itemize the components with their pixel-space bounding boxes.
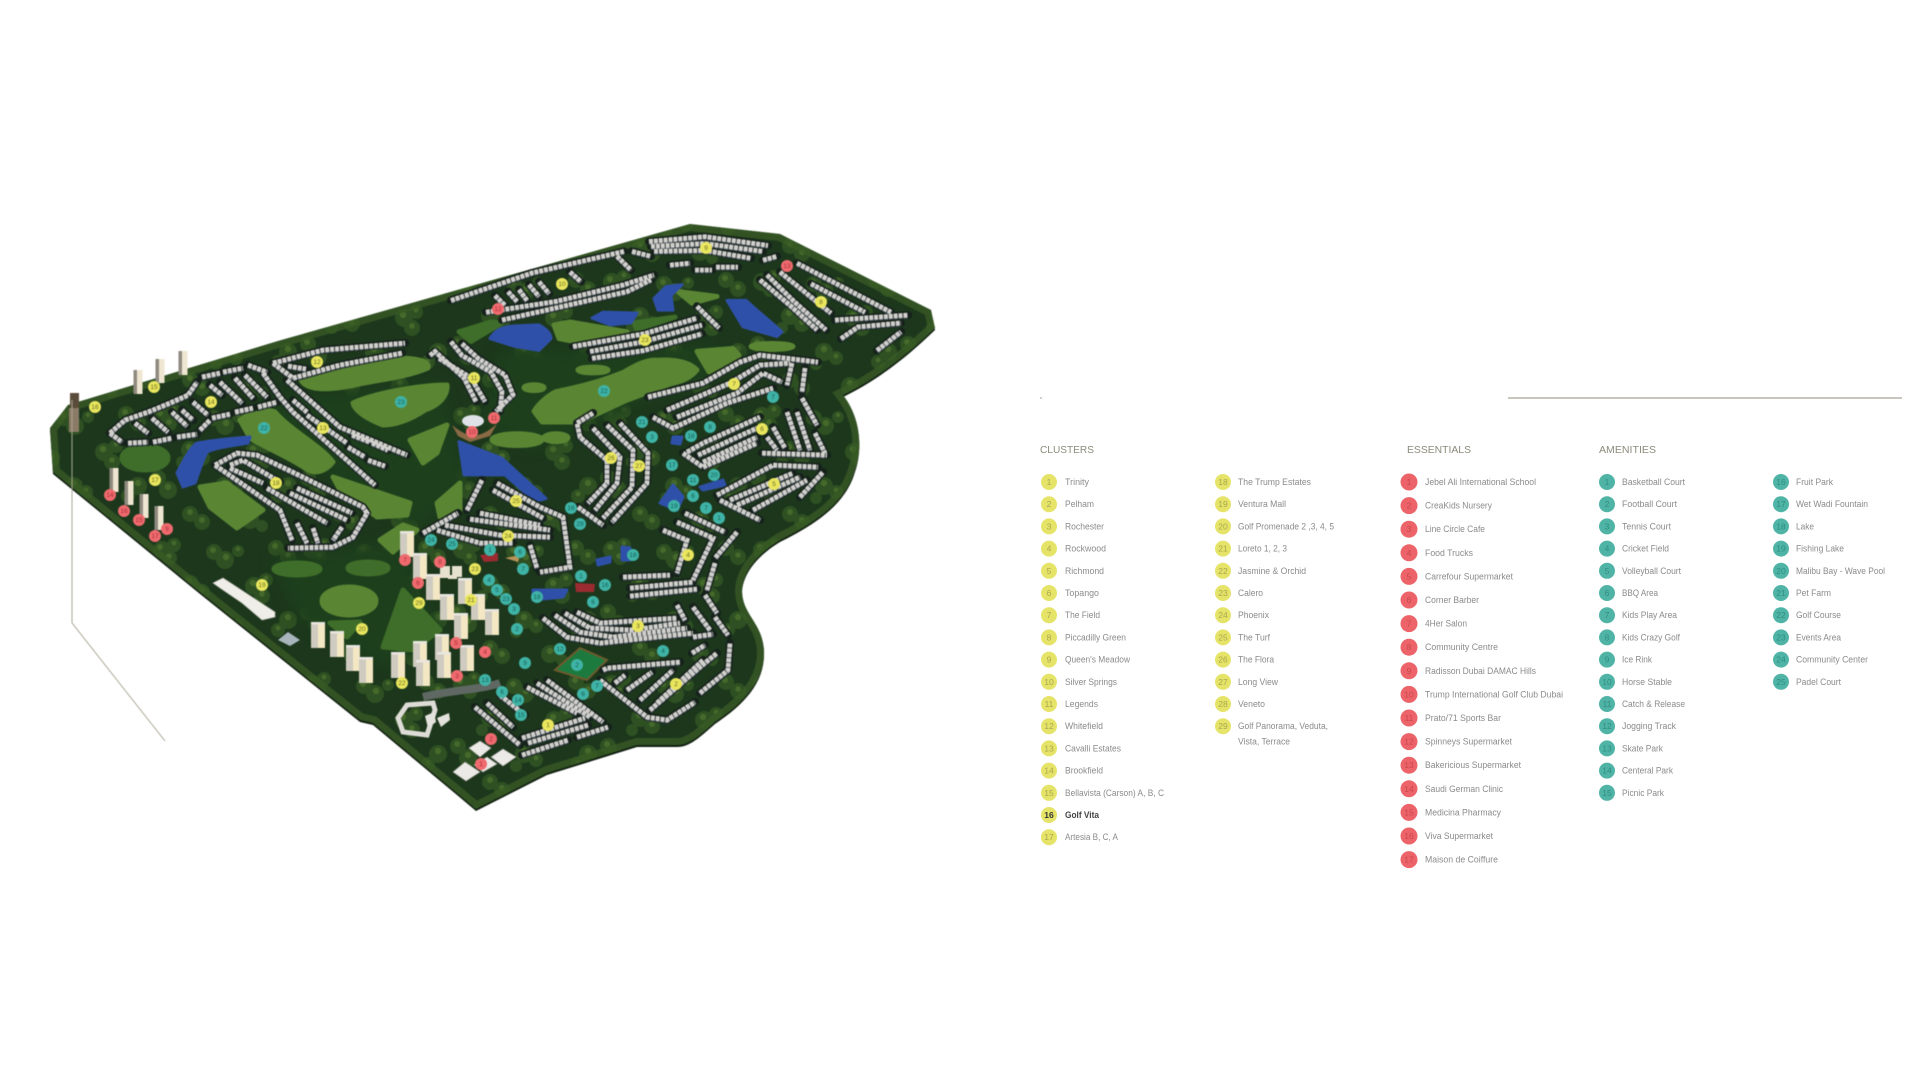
legend list: clusters column 2: 18 (1218, 477, 1228, 487)
small blocks near community centre (440, 566, 462, 579)
legend list: essentials: 16 (1404, 831, 1414, 841)
hotel ring (398, 703, 435, 735)
amenities markers: 15 (517, 712, 525, 719)
hotel annex (425, 712, 450, 728)
legend list: clusters column 2: Calero (1238, 588, 1263, 598)
towers: Loreto and Jasmine (400, 531, 499, 639)
legend list: amenities column 1: 1 (1605, 477, 1610, 487)
amenities markers: 7 (521, 566, 525, 573)
leader line: top right divider (1508, 397, 1902, 399)
amenities markers: 18 (687, 433, 695, 440)
legend list: clusters column 1: Bellavista (Carson) A, B, C (1065, 788, 1164, 798)
legend list: clusters column 2: Veneto (1238, 699, 1265, 709)
cluster: Cavalli Estates (263, 373, 407, 485)
legend list: essentials: 7 (1407, 619, 1412, 629)
amenities markers: 7 (704, 505, 708, 512)
apartment towers and large buildings (69, 351, 516, 781)
legend list: clusters column 2: Ventura Mall (1238, 499, 1286, 509)
legend list: clusters column 1: 3 (1047, 521, 1052, 531)
housing rows (110, 237, 908, 755)
heading: amenities: AMENITIES (1599, 444, 1656, 456)
golf fairways lower (122, 358, 460, 650)
essentials markers: 7 (403, 557, 407, 564)
legend list: clusters column 1: 2 (1047, 499, 1052, 509)
cluster markers (89, 242, 827, 731)
legend list: essentials: 4 (1407, 548, 1412, 558)
legend list: clusters column 2: 20 (1218, 521, 1228, 531)
legend list: clusters column 1: 7 (1047, 610, 1052, 620)
legend list: clusters column 2: 25 (1218, 632, 1228, 642)
legend list: clusters column 2: The Turf (1238, 632, 1270, 642)
legend list: clusters column 2: 27 (1218, 677, 1228, 687)
legend list: essentials: 11 (1405, 713, 1414, 723)
legend list: clusters column 1: Topango (1065, 588, 1099, 598)
legend list: essentials: CreaKids Nursery (1425, 501, 1492, 511)
cluster markers: 7 (732, 381, 736, 388)
legend list: clusters column 2: Long View (1238, 677, 1278, 687)
amenities markers: 12 (556, 646, 564, 653)
legend list: amenities column 1: Picnic Park (1622, 788, 1664, 798)
cluster markers: 26 (607, 455, 615, 462)
legend list: essentials: 3 (1407, 524, 1412, 534)
essentials markers: 9 (165, 526, 169, 533)
legend list: essentials: 9 (1407, 666, 1412, 676)
amenities markers: 22 (600, 388, 608, 395)
map ground (50, 224, 935, 809)
cluster markers: 9 (704, 245, 708, 252)
legend list: amenities column 2: 17 (1776, 499, 1786, 509)
legend list: amenities column 1: Horse Stable (1622, 677, 1672, 687)
legend list: clusters column 1: Legends (1065, 699, 1098, 709)
legend list: amenities column 1: 7 (1605, 610, 1610, 620)
legend list: clusters column 1: 4 (1047, 544, 1052, 554)
legend list: clusters column 1: 1 (1047, 477, 1052, 487)
legend list: clusters column 2: 29 (1218, 721, 1228, 731)
legend list: essentials: 6 (1407, 595, 1412, 605)
essentials markers: 1 (479, 761, 483, 768)
legend list: amenities column 1: Catch & Release (1622, 699, 1685, 709)
cluster markers: 3 (636, 623, 640, 630)
legend list: essentials: Trump International Golf Club Dubai (1425, 689, 1563, 699)
legend list: clusters column 1: 11 (1045, 699, 1054, 709)
amenities markers: 29 (576, 521, 584, 528)
legend list: clusters column 1: Pelham (1065, 499, 1094, 509)
legend list: amenities column 2: Padel Court (1796, 677, 1841, 687)
legend list: clusters column 1: 8 (1047, 632, 1052, 642)
legend list: clusters column 2: 28 (1218, 699, 1228, 709)
amenities markers: 1 (488, 547, 492, 554)
amenities markers: 1 (717, 515, 721, 522)
legend list: amenities column 1: 13 (1602, 743, 1612, 753)
legend list: essentials: 8 (1407, 642, 1412, 652)
cluster markers: 18 (272, 480, 280, 487)
legend list: essentials: 12 (1404, 737, 1414, 747)
legend list: essentials: Radisson Dubai DAMAC Hills (1425, 666, 1536, 676)
panel: amenities (1599, 444, 1885, 801)
lakes (177, 437, 725, 600)
legend list: essentials: Prato/71 Sports Bar (1425, 713, 1501, 723)
legend list: clusters column 2: The Flora (1238, 655, 1274, 665)
building: Ventura Mall (213, 578, 275, 620)
legend list: clusters column 1: Rochester (1065, 521, 1104, 531)
essentials markers: 4 (483, 649, 487, 656)
small dot (1040, 397, 1042, 399)
amenities markers: 4 (487, 577, 491, 584)
legend list: amenities column 1: 8 (1605, 632, 1610, 642)
legend list: amenities column 1: Centeral Park (1622, 766, 1673, 776)
amenities markers: 3 (512, 606, 516, 613)
legend list: clusters column 1: 16 (1044, 810, 1054, 820)
cluster: Queen's Meadow (632, 237, 768, 270)
amenities markers: 16 (601, 582, 609, 589)
legend list: amenities column 2: Community Center (1796, 655, 1868, 665)
cluster markers: 4 (686, 552, 690, 559)
housing road shadow layer (110, 237, 908, 755)
cluster: Topango (683, 398, 827, 467)
cluster markers: 17 (151, 477, 159, 484)
legend list: essentials: Bakericious Supermarket (1425, 760, 1521, 770)
heading: clusters: CLUSTERS (1040, 444, 1094, 456)
legend list: clusters column 2: Vista, Terrace (1238, 736, 1290, 746)
legend list: essentials: 15 (1404, 807, 1414, 817)
cluster markers: 13 (319, 425, 327, 432)
amenities markers: 21 (638, 419, 646, 426)
cluster: Legends (430, 342, 513, 411)
legend list: clusters column 1: Artesia B, C, A (1065, 832, 1118, 842)
cluster markers: 19 (258, 582, 266, 589)
legend list: amenities column 2: Events Area (1796, 632, 1841, 642)
cluster markers: 15 (150, 384, 158, 391)
legend list: amenities column 1: 2 (1605, 499, 1610, 509)
essentials markers: 15 (135, 517, 143, 524)
cluster markers: 23 (471, 566, 479, 573)
amenities markers: 6 (591, 599, 595, 606)
cluster markers: 11 (471, 375, 478, 382)
tower: Golf Vita (69, 393, 79, 432)
legend list: clusters column 2 (1215, 474, 1334, 746)
essentials markers: 8 (438, 559, 442, 566)
cluster markers: 12 (313, 359, 321, 366)
legend list: amenities column 1: 5 (1605, 566, 1610, 576)
legend list: essentials: 5 (1407, 571, 1412, 581)
legend list: clusters column 1: Silver Springs (1065, 677, 1117, 687)
legend list: essentials: Spinneys Supermarket (1425, 737, 1512, 747)
cluster markers: 21 (467, 597, 475, 604)
amenities markers: 13 (481, 677, 489, 684)
legend list: essentials: Community Centre (1425, 642, 1498, 652)
small pavilion (278, 632, 300, 646)
legend list: essentials: 17 (1404, 855, 1414, 865)
essentials markers (104, 260, 793, 770)
cluster markers: 29 (415, 600, 423, 607)
essentials markers: 16 (120, 508, 128, 515)
legend list: amenities column 1: 9 (1605, 655, 1610, 665)
open grass areas (250, 345, 770, 668)
legend list: essentials: 14 (1404, 784, 1414, 794)
cluster markers: 22 (398, 680, 406, 687)
legend list: essentials: Maison de Coiffure (1425, 855, 1498, 865)
legend list: clusters column 1: Trinity (1065, 477, 1089, 487)
amenities markers: 11 (690, 477, 697, 484)
amenities markers: 22 (260, 425, 268, 432)
legend list: clusters column 1: 10 (1044, 677, 1054, 687)
cluster: Richmond (717, 465, 823, 520)
cluster: Whitefield (273, 343, 405, 378)
amenities markers: 18 (533, 594, 541, 601)
legend list: clusters column 1: Queen's Meadow (1065, 655, 1130, 665)
amenities markers: 9 (523, 660, 527, 667)
legend list: amenities column 2: Malibu Bay - Wave Pool (1796, 566, 1885, 576)
legend list: clusters column 2: 23 (1218, 588, 1228, 598)
essentials markers: 12 (494, 306, 502, 313)
legend list: clusters column 2: Golf Promenade 2 ,3, 4, 5 (1238, 521, 1334, 531)
legend list: amenities column 1: 14 (1602, 766, 1612, 776)
amenities markers: 7 (771, 394, 775, 401)
legend list: clusters column 1: Richmond (1065, 566, 1104, 576)
amenities markers: 2 (515, 626, 519, 633)
legend list: clusters column 1: 9 (1047, 655, 1052, 665)
cluster markers: 14 (207, 399, 215, 406)
legend list: essentials: 13 (1404, 760, 1414, 770)
legend list: clusters column 1: 17 (1044, 832, 1054, 842)
legend list: essentials: Jebel Ali International School (1425, 477, 1536, 487)
cluster: Trinity (475, 680, 608, 755)
cluster: The Trump Estates (215, 453, 367, 548)
legend list: clusters column 1: 5 (1047, 566, 1052, 576)
legend list: clusters column 2: Phoenix (1238, 610, 1269, 620)
essentials markers: 3 (455, 673, 459, 680)
amenities markers (258, 385, 779, 721)
essentials markers: 11 (491, 415, 498, 422)
legend list: amenities column 2: 16 (1776, 477, 1786, 487)
amenities markers: 8 (708, 424, 712, 431)
essentials markers: 13 (783, 263, 791, 270)
legend list: essentials: Viva Supermarket (1425, 831, 1493, 841)
amenities markers: 23 (502, 596, 510, 603)
panel: essentials (1400, 444, 1563, 868)
essentials markers: 14 (106, 492, 114, 499)
legend list: amenities column 1: Kids Play Area (1622, 610, 1677, 620)
legend list: essentials: Food Trucks (1425, 548, 1473, 558)
legend list: amenities column 1: Cricket Field (1622, 544, 1669, 554)
legend list: essentials: 2 (1407, 501, 1412, 511)
amenities markers: 16 (567, 505, 575, 512)
amenities markers: 6 (691, 493, 695, 500)
amenities markers: 2 (575, 662, 579, 669)
legend list: amenities column 2: 21 (1776, 588, 1786, 598)
legend list: amenities column 1: Ice Rink (1622, 655, 1652, 665)
legend list: amenities column 2: 25 (1776, 677, 1786, 687)
cluster markers: 6 (760, 426, 764, 433)
legend list: essentials: 1 (1407, 477, 1412, 487)
legend list: amenities column 2: Fishing Lake (1796, 544, 1844, 554)
towers: Golf Promenade (311, 622, 373, 683)
heading: essentials: ESSENTIALS (1407, 444, 1471, 456)
towers: Artesia (110, 468, 164, 530)
cluster: Rochester (543, 605, 713, 643)
legend list: essentials: Line Circle Cafe (1425, 524, 1485, 534)
legend list: essentials: Medicina Pharmacy (1425, 807, 1501, 817)
cluster markers: 23 (641, 337, 649, 344)
legend list: amenities column 2: 22 (1776, 610, 1786, 620)
essentials markers: 17 (151, 533, 159, 540)
legend list: essentials: Carrefour Supermarket (1425, 571, 1513, 581)
legend list: clusters column 1: 13 (1044, 743, 1054, 753)
cluster markers: 16 (91, 404, 99, 411)
legend list: amenities column 1: 6 (1605, 588, 1610, 598)
legend list: essentials: 4Her Salon (1425, 619, 1467, 629)
amenities markers: 1 (579, 573, 583, 580)
legend list: clusters column 2: 26 (1218, 655, 1228, 665)
essentials markers: 10 (468, 429, 476, 436)
golf fairways upper (459, 292, 793, 446)
legend list: amenities column 1: Tennis Court (1622, 521, 1671, 531)
amenities markers: 17 (668, 462, 676, 469)
legend list: clusters column 1: Whitefield (1065, 721, 1103, 731)
essentials markers: 5 (454, 640, 458, 647)
legend list: amenities column 1: Kids Crazy Golf (1622, 632, 1680, 642)
site map (50, 224, 935, 811)
legend list: essentials: Corner Barber (1425, 595, 1479, 605)
amenities markers: 6 (500, 689, 504, 696)
courts, stadium and rock area (423, 415, 607, 697)
legend list: clusters column 1: 15 (1044, 788, 1054, 798)
legend list: clusters column 1: Piccadilly Green (1065, 632, 1126, 642)
cluster markers: 2 (674, 681, 678, 688)
legend list: clusters column 2: Loreto 1, 2, 3 (1238, 544, 1287, 554)
legend list: clusters column 1: 14 (1044, 766, 1054, 776)
amenities markers: 24 (427, 537, 435, 544)
legend list: amenities column 1: Skate Park (1622, 743, 1663, 753)
legend list: amenities column 1: 15 (1602, 788, 1612, 798)
legend list: amenities column 2: 18 (1776, 521, 1786, 531)
legend list: clusters column 1: Rockwood (1065, 544, 1106, 554)
amenities markers: 3 (650, 434, 654, 441)
essentials markers: 6 (416, 580, 420, 587)
leader line: left callout (72, 400, 165, 741)
legend list: essentials: 10 (1404, 689, 1414, 699)
legend list: amenities column 1: Basketball Court (1622, 477, 1685, 487)
legend list: amenities column 2: Pet Farm (1796, 588, 1831, 598)
legend list: clusters column 2: The Trump Estates (1238, 477, 1311, 487)
cluster markers: 8 (819, 299, 823, 306)
legend list: clusters column 1: The Field (1065, 610, 1100, 620)
amenities markers: 5 (495, 587, 499, 594)
legend list: amenities column 2: 23 (1776, 632, 1786, 642)
cluster: The Field (648, 355, 818, 428)
lakes upper (459, 285, 782, 501)
legend list: amenities column 1: Football Court (1622, 499, 1677, 509)
legend list: amenities column 2: Wet Wadi Fountain (1796, 499, 1868, 509)
school buildings (453, 741, 516, 781)
legend list: clusters column 1: 6 (1047, 588, 1052, 598)
cluster markers: 27 (635, 463, 643, 470)
legend list: amenities column 1 (1599, 474, 1685, 801)
amenities markers: 6 (581, 691, 585, 698)
legend list: amenities column 1: BBQ Area (1622, 588, 1658, 598)
legend list: clusters column 1: Brookfield (1065, 766, 1103, 776)
legend list: amenities column 2 (1773, 474, 1885, 690)
legend list: clusters column 2: Golf Panorama, Veduta, (1238, 721, 1328, 731)
cluster: The Flora and Long View (577, 413, 648, 525)
legend list: amenities column 2: 24 (1776, 655, 1786, 665)
cluster markers: 10 (558, 281, 566, 288)
cluster markers: 24 (504, 533, 512, 540)
legend list: essentials (1400, 474, 1563, 868)
cluster markers: 5 (772, 481, 776, 488)
amenities markers: 14 (514, 697, 522, 704)
towers: Bellavista (134, 351, 188, 394)
amenities markers: 4 (661, 648, 665, 655)
legend list: clusters column 1: Golf Vita (1065, 810, 1100, 820)
legend list: amenities column 2: 20 (1776, 566, 1786, 576)
amenities markers: 20 (710, 472, 718, 479)
legend list: amenities column 1: 10 (1602, 677, 1612, 687)
cluster markers: 20 (358, 626, 366, 633)
legend list: clusters column 2: 21 (1218, 544, 1228, 554)
cluster markers: 1 (546, 722, 550, 729)
amenities markers: 19 (670, 503, 678, 510)
amenities markers: 25 (448, 541, 456, 548)
amenities markers: 7 (595, 683, 599, 690)
cluster markers: 25 (512, 498, 520, 505)
legend list: amenities column 2: Golf Course (1796, 610, 1841, 620)
lighter green perimeter band (50, 224, 935, 809)
cluster: Rockwood (623, 513, 737, 635)
legend list: amenities column 1: 12 (1602, 721, 1612, 731)
cluster: Pelham (600, 643, 730, 720)
legend list: amenities column 1: 4 (1605, 544, 1610, 554)
legend list: amenities column 1: 11 (1603, 699, 1612, 709)
cluster: Brookfield (110, 365, 277, 443)
legend list: amenities column 2: Fruit Park (1796, 477, 1833, 487)
legend list: amenities column 2: 19 (1776, 544, 1786, 554)
essentials markers: 2 (489, 736, 493, 743)
legend list: clusters column 2: 19 (1218, 499, 1228, 509)
legend list: clusters column 2: 22 (1218, 566, 1228, 576)
legend list: clusters column 1: Cavalli Estates (1065, 743, 1121, 753)
legend list: essentials: Saudi German Clinic (1425, 784, 1503, 794)
legend list: amenities column 1: Volleyball Court (1622, 566, 1681, 576)
legend list: clusters column 2: Jasmine & Orchid (1238, 566, 1306, 576)
legend list: clusters column 2: 24 (1218, 610, 1228, 620)
towers: Golf Panorama (391, 634, 474, 686)
legend list: amenities column 1: 3 (1605, 521, 1610, 531)
cluster: The Turf and Phoenix (423, 480, 570, 572)
legend list: clusters column 1 (1041, 474, 1164, 845)
amenities markers: 6 (518, 549, 522, 556)
cluster: Piccadilly Green (760, 256, 908, 350)
legend list: amenities column 2: Lake (1796, 521, 1814, 531)
legend list: clusters column 1: 12 (1044, 721, 1054, 731)
panel: clusters (1040, 444, 1334, 845)
amenities markers: 23 (397, 399, 405, 406)
cluster: Silver Springs (451, 251, 654, 320)
amenities markers: 18 (629, 552, 637, 559)
legend list: amenities column 1: Jogging Track (1622, 721, 1676, 731)
map ground shadow edge (50, 226, 935, 811)
cluster: Calero (573, 306, 719, 358)
